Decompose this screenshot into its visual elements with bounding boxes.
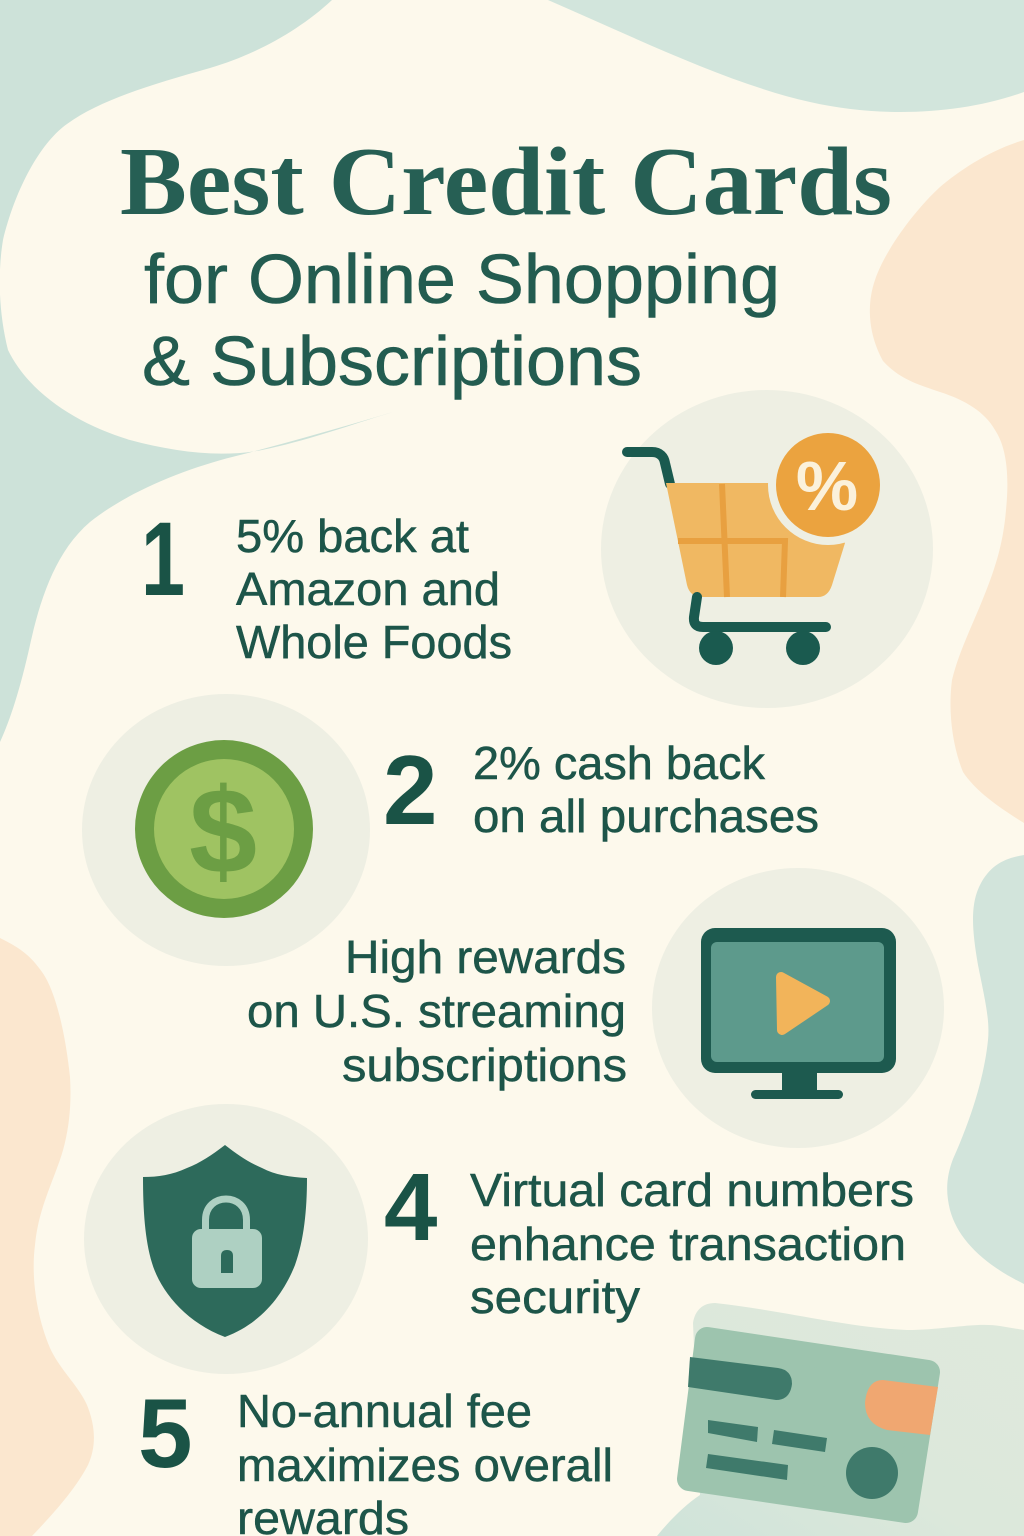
item 1 text: Whole Foods xyxy=(236,616,512,668)
icon: green dollar coin: $ xyxy=(189,763,257,899)
subtitle xyxy=(142,240,780,400)
item 4 text: security xyxy=(470,1271,640,1323)
icon: credit card xyxy=(688,1339,938,1511)
item 1 text xyxy=(236,510,512,668)
title: Best Credit Cards xyxy=(120,128,892,235)
item 5 text xyxy=(237,1385,613,1536)
item 3 text: subscriptions xyxy=(342,1039,627,1091)
background blob: bottom right green xyxy=(657,1303,1024,1536)
background blob: left peach xyxy=(0,938,94,1536)
item 3 text: High rewards xyxy=(345,931,626,983)
background blob: top right green xyxy=(548,0,1024,112)
background blob: top left green xyxy=(0,0,393,742)
icon: streaming monitor xyxy=(652,868,944,1148)
icon: shopping cart with percent badge: % xyxy=(796,447,858,525)
background blob: right peach xyxy=(870,140,1024,823)
item 4 text: Virtual card numbers xyxy=(470,1164,914,1216)
icon: shield with padlock xyxy=(84,1104,368,1374)
item 1 number: 1 xyxy=(141,501,185,618)
item 1 text: Amazon and xyxy=(236,563,500,615)
item 5 text: maximizes overall xyxy=(237,1439,613,1491)
item 2 text: on all purchases xyxy=(473,790,819,842)
item 1 text: 5% back at xyxy=(236,510,469,562)
item 2 text xyxy=(473,737,819,842)
item 4 text: enhance transaction xyxy=(470,1218,906,1270)
item 4 number: 4 xyxy=(384,1154,437,1261)
icon: shopping cart with percent badge xyxy=(601,390,933,708)
item 5 number: 5 xyxy=(138,1378,193,1488)
subtitle: for Online Shopping xyxy=(144,240,780,318)
item 3 text: on U.S. streaming xyxy=(247,985,626,1037)
item 2 text: 2% cash back xyxy=(473,737,766,789)
item 4 text xyxy=(470,1164,914,1323)
item 2 number: 2 xyxy=(383,735,438,845)
icon: green dollar coin xyxy=(82,694,370,966)
item 5 text: No-annual fee xyxy=(237,1385,532,1437)
item 3 text xyxy=(247,931,627,1091)
subtitle: & Subscriptions xyxy=(142,322,642,400)
background blob: right green xyxy=(947,855,1024,1284)
